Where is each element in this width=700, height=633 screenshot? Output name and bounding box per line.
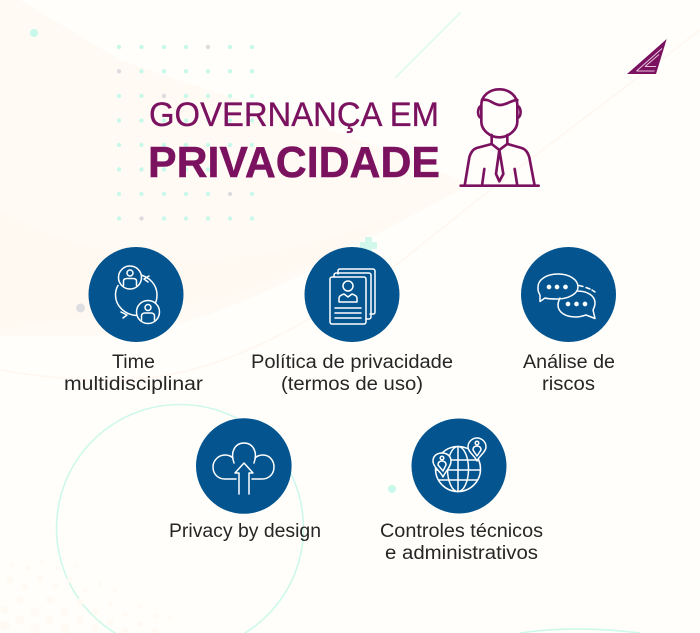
background teal diagonal line: [395, 12, 461, 78]
background faint curve: [0, 30, 700, 380]
label: politica de privacidade: Política de privacidade: [251, 352, 453, 373]
icon circle: speech bubbles: [521, 247, 616, 342]
title line 2: PRIVACIDADE: [148, 138, 440, 187]
label: analise de riscos: [523, 352, 615, 395]
item: controles tecnicos e administrativos: [380, 418, 543, 564]
label: time multidisciplinar: Time: [112, 352, 155, 373]
title line 1: GOVERNANÇA EM: [149, 96, 439, 134]
background teal arc bottom right: [520, 629, 640, 633]
item: privacy by design: [169, 418, 321, 542]
item: analise de riscos: [521, 247, 616, 395]
label: politica de privacidade: (termos de uso): [281, 374, 423, 395]
label: privacy by design: Privacy by design: [169, 521, 321, 542]
icon circle: team cycle: [88, 247, 184, 342]
dot grid: [117, 45, 254, 221]
icon circle: cloud upload: [196, 418, 292, 514]
logo: [627, 39, 667, 74]
label: controles tecnicos e administrativos: [380, 521, 543, 564]
label: controles tecnicos e administrativos: Controles técnicos: [380, 521, 543, 542]
label: analise de riscos: riscos: [542, 374, 595, 395]
background teal ring: [56, 404, 304, 633]
icon: speech bubbles: [538, 274, 595, 318]
title: [148, 96, 440, 187]
icon: cloud upload: [213, 443, 274, 494]
halftone pattern: [0, 560, 172, 633]
label: politica de privacidade: [251, 352, 453, 395]
label: controles tecnicos e administrativos: e administrativos: [385, 543, 538, 564]
item: politica de privacidade: [251, 247, 453, 395]
background peach shape: [0, 0, 470, 336]
icon circle: documents: [304, 247, 400, 342]
label: analise de riscos: Análise de: [523, 352, 615, 373]
label: time multidisciplinar: multidisciplinar: [64, 374, 204, 395]
icon: team cycle: [116, 266, 160, 324]
item: time multidisciplinar: [64, 247, 204, 395]
icon: documents: [330, 269, 375, 324]
label: time multidisciplinar: [64, 352, 204, 395]
background peach band: [0, 205, 420, 330]
icon: person with tie: [461, 89, 539, 186]
icon: globe with pins: [433, 438, 486, 492]
icon circle: globe: [412, 418, 506, 514]
background accent dots: [30, 29, 396, 493]
